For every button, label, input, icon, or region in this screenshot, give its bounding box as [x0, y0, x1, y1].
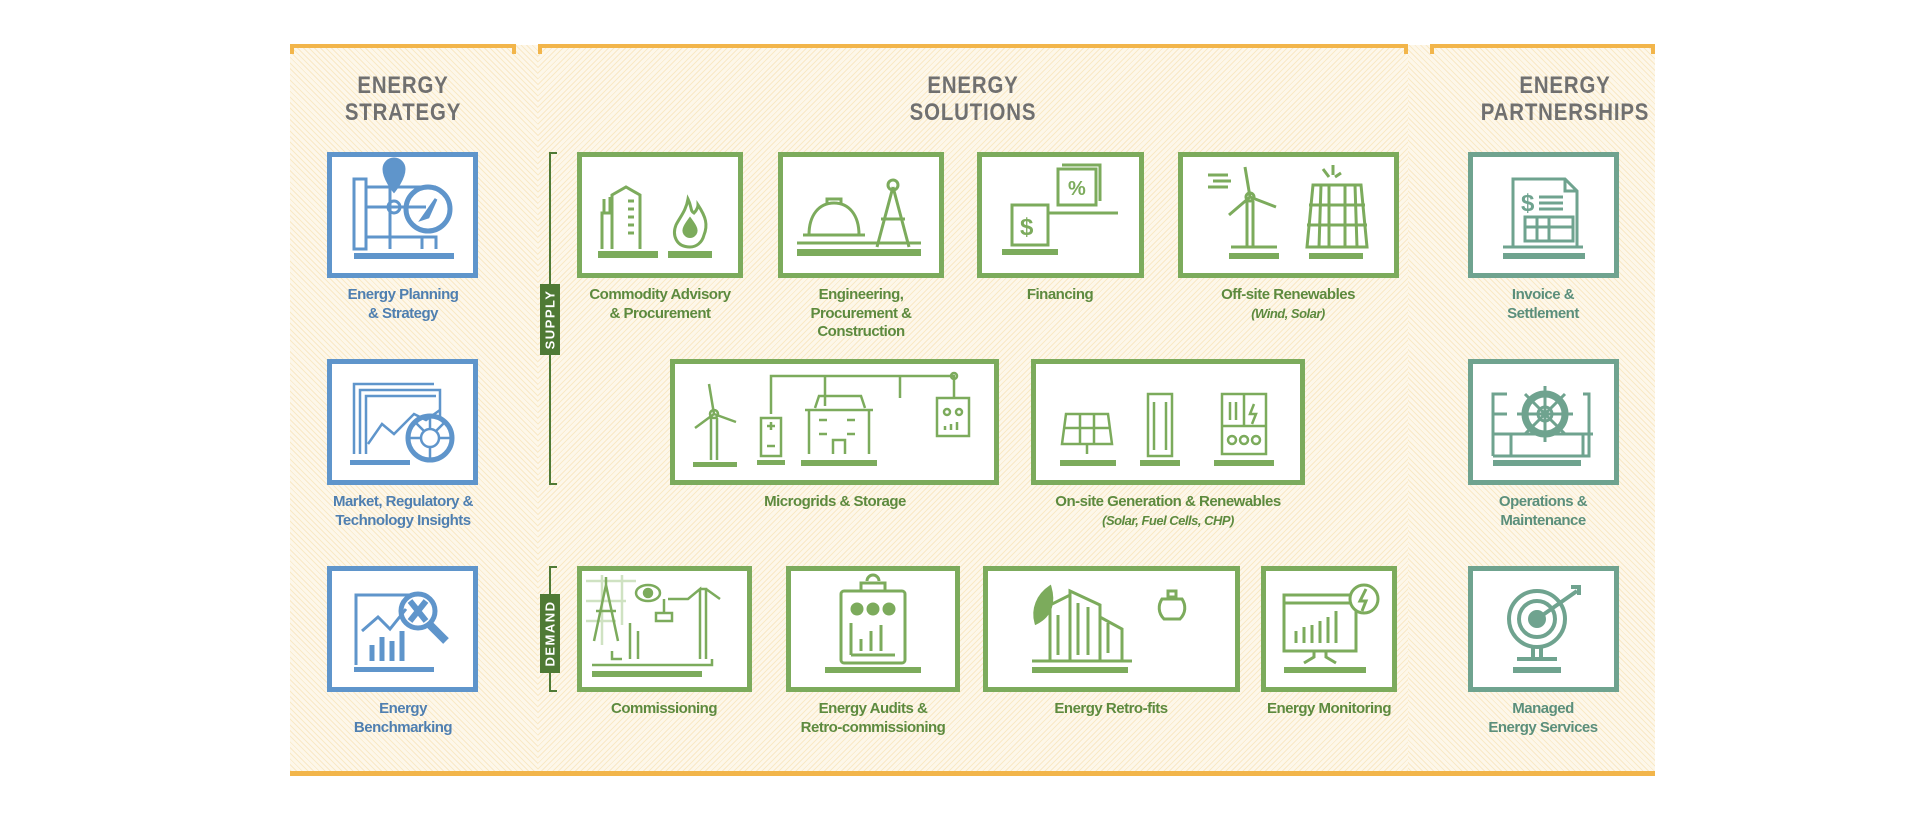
panel: engineering	[778, 152, 944, 278]
heading: energy partnerships: PARTNERSHIPS	[1481, 99, 1649, 126]
tag: supply	[540, 284, 560, 355]
label	[589, 286, 731, 322]
panel: energy monitoring	[1261, 566, 1397, 692]
label: Commodity Advisory	[589, 286, 731, 303]
panel: operations	[1468, 359, 1619, 485]
panel: financing: $	[1020, 214, 1034, 241]
panel: invoice	[1468, 152, 1619, 278]
label	[1499, 493, 1588, 528]
panel: invoice: $	[1521, 190, 1535, 217]
label: On-site Generation & Renewables	[1055, 493, 1281, 510]
label: Financing	[1027, 286, 1093, 303]
label	[333, 493, 473, 528]
label: Energy Retro-fits	[1054, 700, 1168, 717]
heading: energy solutions: SOLUTIONS	[910, 99, 1036, 126]
panel: microgrids	[670, 359, 999, 485]
label: Off-site Renewables	[1221, 286, 1355, 303]
heading: energy strategy: STRATEGY	[345, 99, 461, 126]
panel: commodity advisory	[577, 152, 743, 278]
panel: commissioning	[577, 566, 752, 692]
panel: financing: %	[1068, 178, 1086, 200]
label: Commissioning	[611, 700, 717, 717]
panel: energy audits	[786, 566, 960, 692]
panel: managed services	[1468, 566, 1619, 692]
label: & Strategy	[368, 304, 438, 322]
label: Maintenance	[1500, 512, 1586, 528]
label: Energy	[379, 700, 427, 717]
label: Benchmarking	[354, 718, 452, 736]
label: Managed	[1512, 700, 1574, 717]
label: Energy Services	[1488, 718, 1598, 736]
label: Market, Regulatory &	[333, 493, 473, 510]
label: (Wind, Solar)	[1251, 306, 1325, 320]
panel: energy planning	[327, 152, 478, 278]
tag: supply: SUPPLY	[543, 290, 558, 349]
label	[810, 286, 912, 340]
panel: benchmarking	[327, 566, 478, 692]
label: Energy Monitoring	[1267, 700, 1391, 717]
label: Procurement &	[810, 304, 912, 322]
supply bracket	[549, 152, 557, 485]
heading: energy solutions: ENERGY	[927, 72, 1019, 99]
label: Engineering,	[819, 286, 903, 303]
tag: demand: DEMAND	[542, 600, 558, 667]
label: (Solar, Fuel Cells, CHP)	[1102, 512, 1234, 528]
heading: energy partnerships: ENERGY	[1519, 72, 1611, 99]
panel: retrofits	[983, 566, 1240, 692]
demand bracket	[549, 566, 557, 692]
label	[354, 700, 452, 736]
label: & Procurement	[609, 304, 711, 322]
label: Energy Planning	[348, 286, 458, 303]
label	[1055, 493, 1281, 528]
heading: energy partnerships	[1481, 72, 1649, 126]
label	[801, 700, 945, 736]
label	[1221, 286, 1355, 320]
heading: energy strategy	[345, 72, 461, 126]
label: Technology Insights	[335, 512, 471, 528]
label	[1488, 700, 1598, 736]
label	[1507, 286, 1580, 322]
panel: off-site renewables	[1178, 152, 1399, 278]
label: Retro-commissioning	[801, 718, 945, 736]
label	[348, 286, 458, 322]
heading: energy solutions	[910, 72, 1036, 126]
label: Energy Audits &	[819, 700, 927, 717]
label: Settlement	[1507, 304, 1579, 322]
panel: on-site generation	[1031, 359, 1305, 485]
panel: market insights	[327, 359, 478, 485]
label: Invoice &	[1512, 286, 1574, 303]
heading: energy strategy: ENERGY	[357, 72, 449, 99]
panel: financing	[977, 152, 1144, 278]
label: Construction	[817, 323, 905, 340]
label: Operations &	[1499, 493, 1587, 510]
tag: demand	[540, 594, 560, 673]
label: Microgrids & Storage	[764, 493, 906, 510]
